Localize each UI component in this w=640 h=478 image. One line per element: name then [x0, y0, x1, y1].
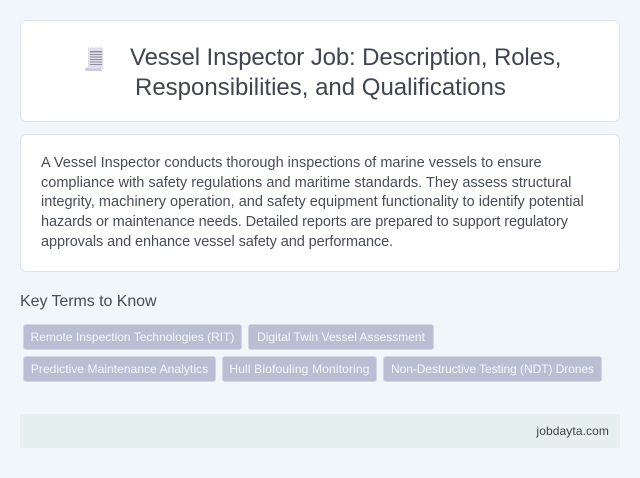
footer bar — [20, 414, 620, 448]
tag: hull biofouling: Hull Biofouling Monitoring — [229, 362, 370, 376]
text block: description — [41, 155, 584, 250]
heading: key terms: Key Terms to Know — [20, 293, 157, 310]
tag: RIT: Remote Inspection Technologies (RIT) — [31, 330, 234, 344]
tag: digital twin: Digital Twin Vessel Assessment — [257, 330, 425, 344]
tag list — [23, 324, 602, 382]
footer text: jobdayta.com — [536, 424, 609, 438]
tag: predictive maintenance — [23, 356, 216, 382]
tag: digital twin — [248, 324, 434, 350]
text block: description: hazards or maintenance needs. Detailed reports are prepared to support regulatory — [41, 214, 568, 230]
tag: NDT drones — [383, 356, 602, 382]
panel: title card — [20, 20, 620, 122]
title: Vessel Inspector Job: Description, Roles, — [130, 44, 561, 71]
text block: description: compliance with safety regulations and maritime standards. They assess structural — [41, 174, 571, 190]
text block: description: approvals and enhance vessel safety and performance. — [41, 234, 393, 250]
panel: description — [20, 134, 620, 272]
tag: hull biofouling — [222, 356, 377, 382]
title: Responsibilities, and Qualifications — [135, 74, 506, 101]
title — [130, 44, 561, 101]
tag: RIT — [23, 324, 242, 350]
icon: document scroll — [85, 47, 103, 71]
tag: NDT drones: Non-Destructive Testing (NDT) Drones — [391, 362, 594, 376]
text block: description: A Vessel Inspector conducts thorough inspections of marine vessels to ensure — [41, 155, 542, 171]
text block: description: integrity, machinery operation, and safety equipment functionality to identify potential — [41, 194, 584, 210]
tag: predictive maintenance: Predictive Maintenance Analytics — [31, 362, 208, 376]
